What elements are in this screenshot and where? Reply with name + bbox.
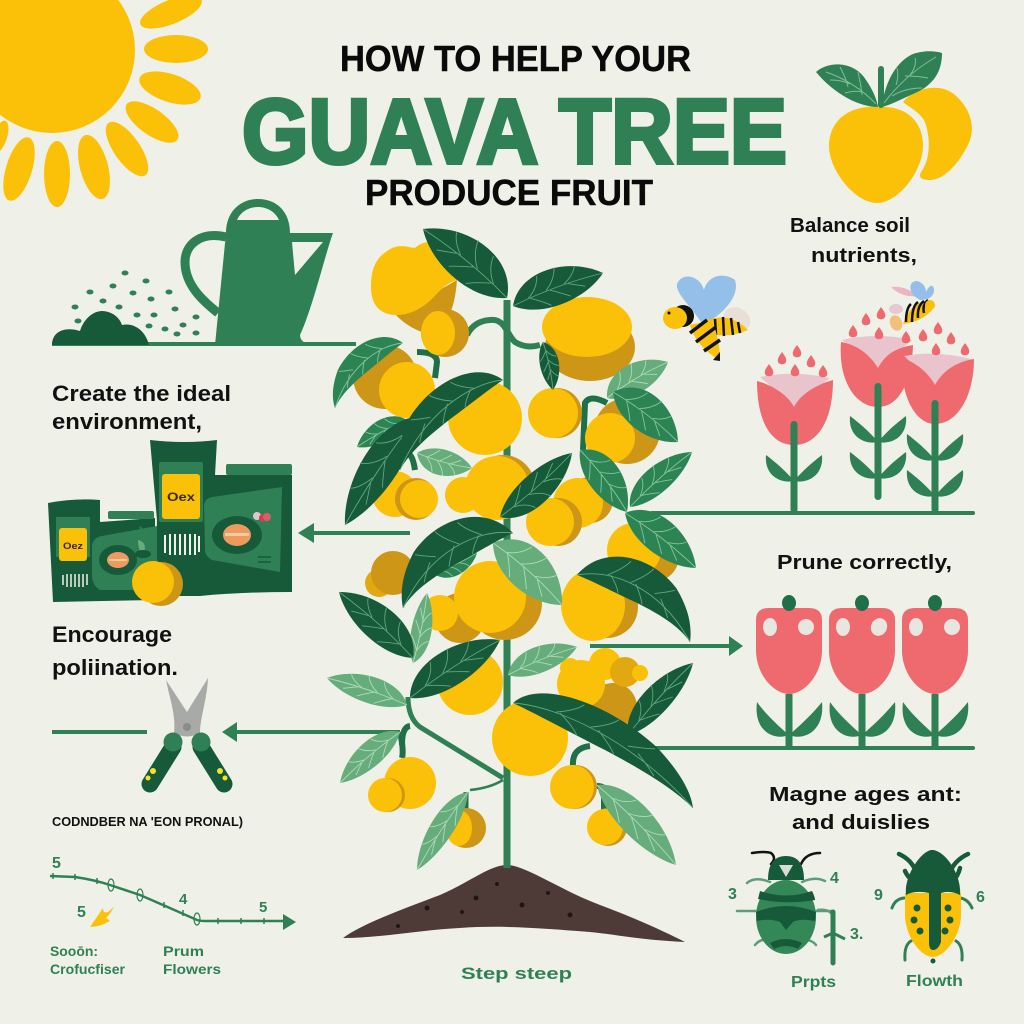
fruit: bottom right <box>550 765 597 809</box>
back fruits <box>353 242 679 848</box>
bloom left <box>757 345 833 513</box>
fruit: row four right <box>607 523 679 582</box>
flowers: three open blooms <box>757 307 974 513</box>
icon: fertilizer bags <box>48 440 292 606</box>
text: prune correctly: Prune correctly, <box>777 551 952 574</box>
arrow: from tree to shears <box>222 722 400 742</box>
text: balance soil nutrients: nutrients, <box>811 244 917 267</box>
beetle numbers and labels: 3 <box>728 886 737 903</box>
fruit cluster: row three centre <box>445 455 535 520</box>
icon: guava fruit top right <box>816 51 972 203</box>
heading line 2: GUAVA TREE <box>242 81 787 183</box>
beetle numbers and labels: 6 <box>976 889 985 906</box>
text: create the ideal environment: environment, <box>52 409 202 434</box>
text: encourage pollination: Encourage <box>52 622 172 647</box>
bud 2 <box>829 595 895 748</box>
title <box>242 38 787 213</box>
fruit: lowest left <box>446 808 486 848</box>
text: encourage pollination: poliination. <box>52 655 178 680</box>
fruit cluster: lower right <box>557 648 648 731</box>
tree <box>315 209 713 942</box>
arrow: from tree to fertilizer <box>298 523 410 543</box>
bloom right <box>902 322 974 513</box>
trunk and branches <box>400 300 629 868</box>
fruit: centre <box>448 381 522 455</box>
beetle numbers and labels: 4 <box>830 870 839 887</box>
timeline chart: 4 <box>179 891 188 908</box>
heading line 1: HOW TO HELP YOUR <box>340 38 691 79</box>
bud 1 <box>756 595 822 748</box>
soil mound <box>343 865 685 942</box>
timeline chart: 5 <box>52 855 61 872</box>
icon: pruning shears <box>52 678 228 784</box>
fruit: lower centre large <box>492 700 568 776</box>
icon: small bee <box>888 281 935 333</box>
icon: fertilizer bags: Oex <box>167 490 195 504</box>
fruit: row four left <box>365 551 415 597</box>
fruit: small centre right <box>528 388 582 438</box>
fruit: right large <box>561 569 638 641</box>
text: balance soil nutrients: Balance soil <box>790 214 910 237</box>
beetle numbers and labels: Prpts <box>791 974 836 991</box>
fruit: lowest right <box>587 808 627 846</box>
timeline chart: Flowers <box>163 961 221 977</box>
fruit: bottom left pair <box>368 757 436 812</box>
text: manage ages: and duislies <box>792 811 930 834</box>
icon: sun <box>0 0 208 207</box>
fruit cluster: row three left <box>372 471 438 520</box>
text: manage ages <box>769 783 962 834</box>
timeline chart <box>50 855 296 977</box>
beetle numbers and labels: 9 <box>874 887 883 904</box>
icon: yellow beetle <box>892 850 972 964</box>
flowers: three closed buds <box>756 595 968 748</box>
icon: fertilizer bags: Oez <box>63 541 84 551</box>
bud 3 <box>902 595 968 748</box>
fruit: right middle <box>585 398 660 464</box>
text: balance soil nutrients <box>790 214 917 267</box>
timeline chart: Prum <box>163 943 204 959</box>
fruit cluster: row three right <box>526 477 613 546</box>
icon: green beetle <box>737 852 845 963</box>
guide lines from tree to right panels <box>590 511 975 750</box>
beetle numbers and labels: 3. <box>850 926 863 943</box>
icon: large bee <box>663 276 755 361</box>
heading line 3: PRODUCE FRUIT <box>365 172 653 213</box>
text: create the ideal environment <box>52 381 231 434</box>
timeline chart: 5 <box>77 904 86 921</box>
leaves <box>315 209 713 875</box>
fruit: central large <box>422 561 542 643</box>
timeline chart: Sooōn: <box>50 943 98 959</box>
text: encourage pollination <box>52 622 178 680</box>
fruit: upper right <box>542 297 635 381</box>
fruit: lower left <box>437 649 503 715</box>
text: create the ideal environment: Create the ideal <box>52 381 231 406</box>
fruit: upper left <box>371 242 469 357</box>
timeline chart: Crofucfiser <box>50 961 126 977</box>
caption: step steep: Step steep <box>461 964 572 983</box>
fruit: left middle <box>353 345 435 418</box>
bloom middle <box>841 307 913 500</box>
beetle numbers and labels: Flowth <box>906 973 963 990</box>
timeline chart: 5 <box>259 899 267 916</box>
icon: watering can with soil and seeds <box>52 199 356 346</box>
text: manage ages: Magne ages ant: <box>769 783 962 806</box>
beetle numbers and labels <box>728 870 985 991</box>
small caps caption: CODNDBER NA 'EON PRONAL) <box>52 815 243 829</box>
